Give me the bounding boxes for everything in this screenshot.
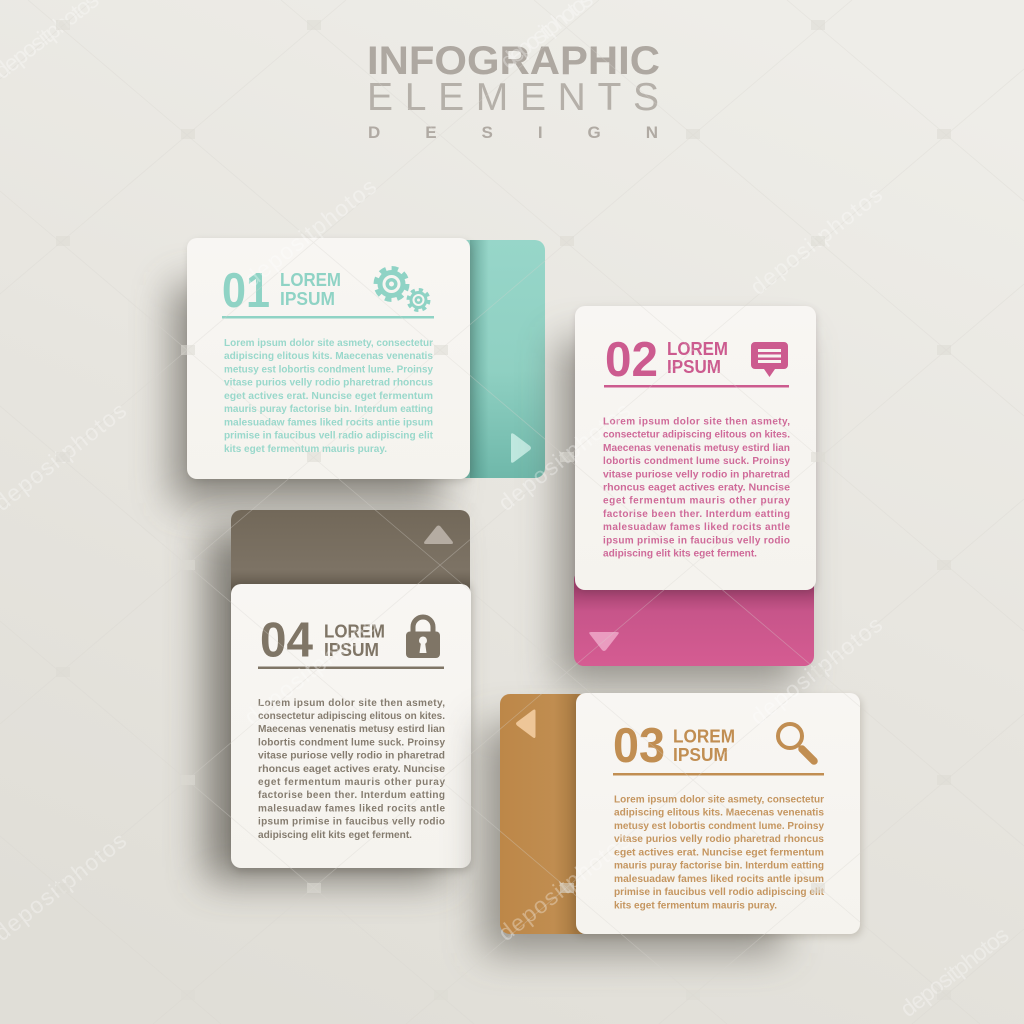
text 04: consectetur adipiscing elitous on kites. [258, 711, 445, 722]
shadow of panel 01 [172, 285, 442, 503]
title: ELEMENTS [367, 76, 659, 119]
heading 03: IPSUM [673, 745, 728, 765]
text 04: lobortis condment lume suck. Proinsy [258, 737, 445, 748]
card shadow [232, 582, 472, 872]
text 03: eget actives erat. Nuncise eget fermentum [614, 848, 824, 858]
watermark: depositphotos [493, 827, 635, 946]
watermark: depositphotos [239, 173, 381, 292]
heading 01: LOREM [280, 270, 341, 290]
panel 01: process [172, 238, 545, 503]
heading 01: 01 [222, 264, 270, 318]
shadow of panel 04 [206, 530, 446, 880]
text 04: malesuadaw fames liked rocits antle [258, 803, 445, 814]
pink tab [574, 570, 814, 666]
text 04: eget fermentum mauris other puray [258, 777, 445, 788]
heading 04: LOREM [324, 622, 385, 642]
text 01 [224, 338, 434, 455]
arrow: left [516, 709, 536, 738]
text 04: adipiscing elit kits eget ferment. [258, 830, 412, 841]
text 02: malesuadaw fames liked rocits antle [603, 522, 790, 533]
text 01: Lorem ipsum dolor site asmety, consectetur [224, 338, 433, 349]
divider 01 [222, 316, 434, 318]
text 02 [603, 416, 790, 560]
white card [231, 584, 471, 868]
arrow: down [589, 632, 619, 651]
heading 02: IPSUM [667, 357, 721, 377]
text 03: vitase purios velly rodio pharetrad rhoncus [614, 834, 824, 845]
text 02: vitase puriose velly rodio in pharetrad [603, 469, 790, 480]
text 03 [614, 794, 825, 912]
heading 04: IPSUM [324, 640, 379, 660]
text 01: vitase purios velly rodio pharetrad rhoncus [224, 378, 433, 389]
heading 04: 04 [260, 614, 313, 668]
text 04: ipsum primise in faucibus velly rodio [258, 817, 445, 828]
text 01: metusy est lobortis condment lume. Proinsy [224, 364, 433, 376]
text 03: adipiscing elitous kits. Maecenas venenatis [614, 808, 824, 819]
card shadow [189, 241, 472, 481]
teal tab [450, 240, 545, 478]
heading 03 [613, 719, 735, 773]
text 03: mauris puray factorise bin. Interdum eatting [614, 861, 824, 872]
text 02: consectetur adipiscing elitous on kites. [603, 430, 790, 441]
text 03: Lorem ipsum dolor site asmety, consectetur [614, 794, 824, 806]
heading 04 [260, 614, 385, 668]
heading 02 [605, 333, 728, 387]
divider 02 [604, 385, 789, 388]
panel 02: message [558, 306, 816, 685]
text 02: ipsum primise in faucibus velly rodio [603, 535, 790, 546]
watermark: depositphotos [745, 611, 887, 730]
watermark: depositphotos [493, 397, 635, 516]
title: DESIGN [368, 123, 658, 142]
watermark: depositphotos [745, 181, 887, 300]
white card [187, 238, 470, 479]
text 03: malesuadaw fames liked rocits antle ipsum [614, 874, 824, 885]
title: INFOGRAPHIC [367, 39, 660, 83]
heading 01 [222, 264, 341, 318]
shadow of panel 02 [558, 340, 798, 685]
heading 01: IPSUM [280, 289, 335, 309]
text 01: eget actives erat. Nuncise eget fermentum [224, 391, 433, 402]
icon: padlock [406, 617, 440, 658]
panel 04: security [206, 510, 472, 880]
watermark: depositphotos [895, 921, 1014, 1022]
icon: gears [376, 268, 428, 310]
text 01: malesuadaw fames liked rocits antie ipsum [224, 418, 433, 428]
icon: speech bubble [751, 342, 788, 377]
arrow: up [424, 526, 453, 544]
text 01: kits eget fermentum mauris puray. [224, 444, 387, 455]
text 02: rhoncus eaget actives eraty. Nuncise [603, 482, 790, 494]
title [367, 39, 660, 142]
orange tab [500, 694, 590, 934]
white card [576, 693, 860, 934]
text 03: metusy est lobortis condment lume. Proinsy [614, 821, 824, 832]
icon: magnifier [778, 724, 814, 761]
text 04: vitase puriose velly rodio in pharetrad [258, 751, 445, 762]
text 02: factorise been ther. Interdum eatting [603, 509, 790, 520]
text 01: primise in faucibus vell radio adipiscing elit [224, 431, 434, 442]
card shadow [574, 696, 862, 937]
heading 03: LOREM [673, 726, 735, 746]
divider 04 [258, 666, 444, 669]
text 01: mauris puray factorise bin. Interdum eatting [224, 404, 433, 415]
text 01: adipiscing elitous kits. Maecenas venenatis [224, 351, 433, 362]
panel 03: search [483, 693, 862, 953]
text 02: eget fermentum mauris other puray [603, 496, 790, 507]
text 02: adipiscing elit kits eget ferment. [603, 548, 757, 560]
watermark: depositphotos [239, 611, 381, 730]
heading 02: 02 [605, 333, 658, 387]
text 04: factorise been ther. Interdum eatting [258, 790, 445, 801]
shadow of panel 03 [483, 725, 783, 953]
heading 03: 03 [613, 719, 665, 773]
card shadow [576, 309, 816, 593]
text 03: kits eget fermentum mauris puray. [614, 900, 777, 912]
text 04: Maecenas venenatis metusy estird lian [258, 724, 445, 735]
text 02: Maecenas venenatis metusy estird lian [603, 443, 790, 454]
text 02: lobortis condment lume suck. Proinsy [603, 456, 790, 467]
text 04: rhoncus eaget actives eraty. Nuncise [258, 764, 445, 775]
text 04: Lorem ipsum dolor site then asmety, [258, 698, 445, 709]
text 02: Lorem ipsum dolor site then asmety, [603, 416, 790, 428]
heading 02: LOREM [667, 339, 728, 359]
brown tab [231, 510, 470, 610]
divider 03 [613, 773, 824, 776]
text 03: primise in faucibus vell rodio adipiscing elit [614, 887, 825, 898]
text 04 [258, 698, 445, 841]
arrow: right [511, 433, 531, 463]
white card [575, 306, 816, 590]
